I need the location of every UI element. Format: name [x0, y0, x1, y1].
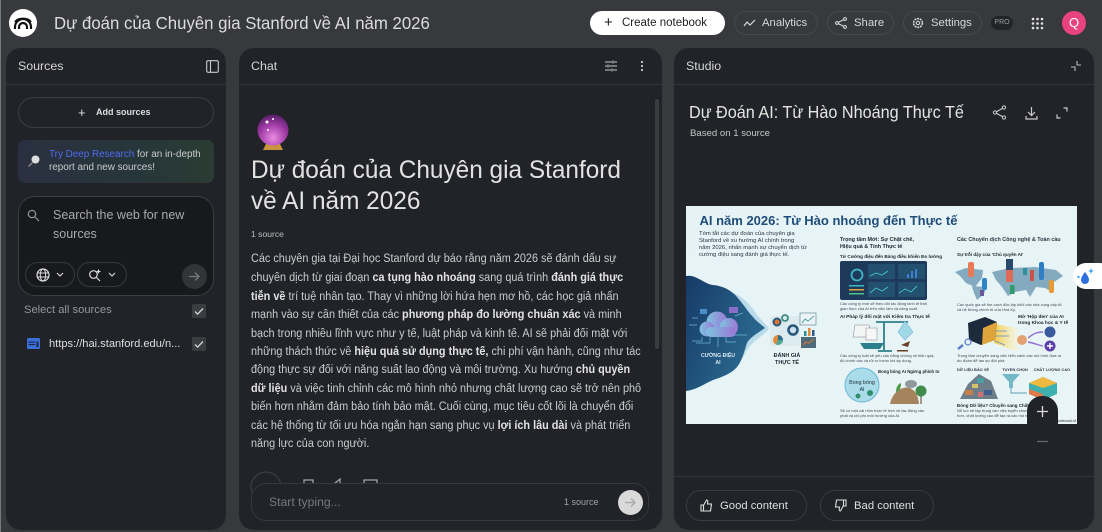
text: động thực sự đối với năng suất lao động và môi trường. Xu hướng chủ quyền [251, 364, 630, 376]
icon: apps grid [1032, 18, 1044, 30]
good content button: Good content [720, 500, 788, 512]
reality evaluation icons: ĐÁNH GIÁ [774, 352, 800, 359]
summary heading [251, 156, 621, 215]
column: global shifts: Mở 'Hộp đen' của AI [1018, 314, 1064, 320]
search submit arrow [182, 264, 207, 289]
checkbox: source [192, 337, 206, 351]
source count: 1 source [251, 229, 284, 239]
good content button [686, 490, 807, 521]
infographic image [686, 206, 1077, 424]
text: dữ liệu và việc tinh chỉnh các mô hình nhỏ nhưng chất lượng cao sẽ trở nên phổ [251, 383, 641, 395]
icon: tune [605, 60, 617, 72]
settings button: Settings [931, 17, 972, 29]
icon: search [28, 210, 40, 222]
icon: collapse panel [206, 60, 219, 73]
icon: zoom out [1037, 440, 1048, 442]
column: global shifts: Các Chuyển dịch Công nghệ & Toàn cầu [957, 236, 1061, 243]
text: mạnh vào sự cần thiết của các phương pháp đo lường chuẩn xác và minh [251, 309, 622, 321]
column: new focus: Từ Cường điệu đến Bảng điều khiển Đo lường [840, 253, 942, 259]
add sources button [18, 97, 214, 128]
column: global shifts [955, 236, 1076, 423]
column: new focus: Các công ty luật sẽ yêu cầu bằng chứng về hiệu quả, [840, 353, 935, 358]
text: các hệ thống từ tối ưu hóa ngắn hạn sang phục vụ lợi ích lâu dài và phát triển [251, 420, 630, 432]
icon: share [992, 105, 1006, 120]
column: global shifts: Đóng Dữ liệu? Chuyển sang Chất lượng [957, 402, 1043, 408]
user avatar [1062, 11, 1086, 35]
panel: studio [674, 48, 1094, 530]
sovereignty world map [955, 259, 1063, 300]
infographic intro: cường điệu sang đánh giá thực tế. [699, 252, 790, 258]
column: global shifts: trong Khoa học & Y tế [1018, 319, 1069, 326]
chat heading: Chat [251, 59, 277, 73]
column: global shifts: TUYỂN CHỌN [1002, 367, 1028, 372]
add sources button: Add sources [96, 107, 151, 117]
bad content button [820, 490, 934, 521]
message action icons [250, 472, 378, 494]
AI bubble illustration: Bong bóng [849, 380, 875, 386]
column: new focus: Sẽ có một cái nhìn thực tế hơn về tác động vào [840, 408, 925, 413]
column: new focus: phát và chi phí môi trường của AI. [840, 413, 900, 418]
column: new focus [840, 237, 942, 418]
infographic title: AI năm 2026: Từ Hào nhoáng đến Thực tế [700, 213, 958, 228]
source row [27, 337, 206, 351]
scales of justice illustration [853, 321, 913, 352]
analytics button: Analytics [762, 17, 807, 29]
text: biến hơn nhằm đảm bảo tính bảo mật. Cuối cùng, mục tiêu cốt lõi là chuyển đổi [251, 401, 633, 413]
summary heading: Dự đoán của Chuyên gia Stanford [251, 156, 621, 184]
column: new focus: AI Pháp lý đối mặt với Kiểm tra Thực tế [840, 313, 930, 320]
icon: source page [27, 338, 40, 349]
add sources button: + [78, 105, 86, 120]
reality evaluation icons [770, 313, 816, 366]
panel: chat [239, 48, 662, 530]
bad content button: Bad content [854, 500, 914, 512]
column: global shifts: dự đoán để tạo sự đột phá. [957, 358, 1006, 363]
select all sources row: Select all sources [24, 304, 112, 316]
zoom controls [1027, 396, 1058, 458]
web search box [18, 196, 214, 296]
input placeholder: Start typing... [269, 495, 341, 509]
black box illustration [958, 317, 1056, 352]
column: global shifts: CHẤT LƯỢNG CAO [1034, 367, 1070, 372]
infographic intro [699, 230, 807, 258]
notebook title: Dự đoán của Chuyên gia Stanford về AI năm 2026 [54, 13, 430, 33]
send button [618, 490, 643, 515]
analytics button [734, 11, 818, 35]
column: new focus: Trọng tâm Mới: Sự Chặt chẽ, [840, 237, 914, 243]
create notebook button [590, 11, 725, 35]
infographic intro: Tóm tắt các dự đoán của chuyên gia [699, 230, 795, 237]
search placeholder: sources [53, 227, 97, 241]
settings button [903, 11, 982, 35]
deep research banner: report and new sources! [49, 162, 155, 172]
deep research banner [18, 140, 214, 183]
checkbox: select all [192, 304, 206, 318]
column: global shifts: Trọng tâm chuyển sang việc hiểu cách các mô hình đưa ra [957, 353, 1062, 358]
text: Các chuyên gia tại Đại học Stanford dự báo rằng năm 2026 sẽ đánh dấu sự [251, 253, 617, 265]
icon: collapse [1071, 61, 1081, 71]
column: new focus: độ chính xác và rủi ro trước khi áp dụng. [840, 358, 912, 363]
create notebook button: + [604, 14, 613, 31]
icon: notebook logo [9, 9, 37, 37]
chat input [251, 483, 649, 521]
column: global shifts: và hệ thống chính trị của Hoa Kỳ. [957, 307, 1016, 312]
data quality illustration [960, 374, 1057, 400]
web filter [25, 262, 75, 287]
pro badge: PRO [994, 19, 1010, 26]
window edge [0, 0, 1, 532]
text: năng lực của con người. [251, 438, 369, 450]
icon: blue droplets [1077, 268, 1094, 284]
column: global shifts: Sự trỗi dậy của 'Chủ quyền AI' [957, 251, 1023, 257]
column: global shifts: DỮ LIỆU BẢO VỆ [957, 367, 989, 372]
column: new focus: Bong bóng AI Ngừng phình to [878, 369, 940, 374]
text: bạch trong nhiều lĩnh vực như y tế, luật pháp và kinh tế. AI sẽ phải đối mặt với [251, 328, 627, 340]
scrollbar [655, 99, 659, 349]
column: new focus: Hiệu quả & Tính Thực tế [840, 243, 902, 250]
deep research banner: Try Deep Research for an in-depth [49, 149, 201, 160]
text: chuyển dịch từ giai đoạn ca tụng hào nhoáng sang quá trình đánh giá thực [251, 272, 623, 284]
floating droplet tab [1073, 263, 1102, 289]
top bar [9, 9, 1086, 37]
left hype cloud [686, 276, 769, 391]
text: những thách thức về hiệu quả sử dụng thực tế, chi phí vận hành, cũng như tác [251, 346, 641, 358]
research filter [77, 262, 127, 287]
source url: https://hai.stanford.edu/n... [49, 338, 180, 350]
pro badge [991, 16, 1013, 30]
left hype cloud: AI [715, 360, 721, 366]
search placeholder [53, 208, 184, 241]
panel: sources [6, 48, 226, 530]
left hype cloud: CƯỜNG ĐIỆU [701, 351, 735, 359]
icon: more menu [640, 60, 644, 72]
based on source: Based on 1 source [690, 128, 770, 139]
column: global shifts: Các quốc gia sẽ tìm cách độc lập khỏi các nhà cung cấp AI [957, 302, 1062, 307]
dashboard illustration [840, 261, 927, 300]
summary heading: về AI năm 2026 [251, 187, 420, 215]
search placeholder: Search the web for new [53, 208, 184, 222]
column: new focus: Các công ty mới sẽ theo dõi tác động kinh tế thời [840, 301, 927, 306]
icon: download [1025, 107, 1038, 120]
column: global shifts: Nỗ lực sẽ tập trung vào việc tuyển chọn dữ liệu có [957, 408, 1047, 413]
icon: crystal ball [258, 114, 288, 150]
user avatar: Q [1069, 15, 1079, 30]
AI bubble illustration: AI [859, 387, 865, 393]
artifact title: Dự Đoán AI: Từ Hào Nhoáng Thực Tế [689, 102, 964, 122]
column: global shifts: hơn, chất lượng cao để tạo ra các mô hình tốt hơn. [957, 413, 1048, 418]
icon: fullscreen [1056, 107, 1068, 119]
infographic intro: năm 2026, nhấn mạnh sự chuyển dịch từ [699, 244, 807, 251]
studio heading: Studio [686, 59, 721, 73]
notebooklm credit: NotebookLM [1056, 419, 1076, 423]
summary body text [251, 252, 641, 450]
input source count: 1 source [564, 497, 599, 507]
icon: magnifier [28, 156, 40, 167]
AI bubble illustration [845, 368, 926, 404]
sources heading: Sources [18, 59, 63, 73]
column: new focus: gian thực của AI trên việc làm và năng suất. [840, 306, 918, 311]
share button [827, 11, 894, 35]
create notebook button: Create notebook [622, 17, 707, 29]
infographic intro: Stanford về xu hướng AI chính trong [699, 238, 794, 244]
reality evaluation icons: THỰC TẾ [775, 359, 799, 366]
icon: zoom in [1037, 406, 1048, 417]
share button: Share [854, 17, 884, 29]
text: tiễn về trí tuệ nhân tạo. Thay vì những lời hứa hẹn mơ hồ, các học giả nhấn [251, 291, 619, 303]
